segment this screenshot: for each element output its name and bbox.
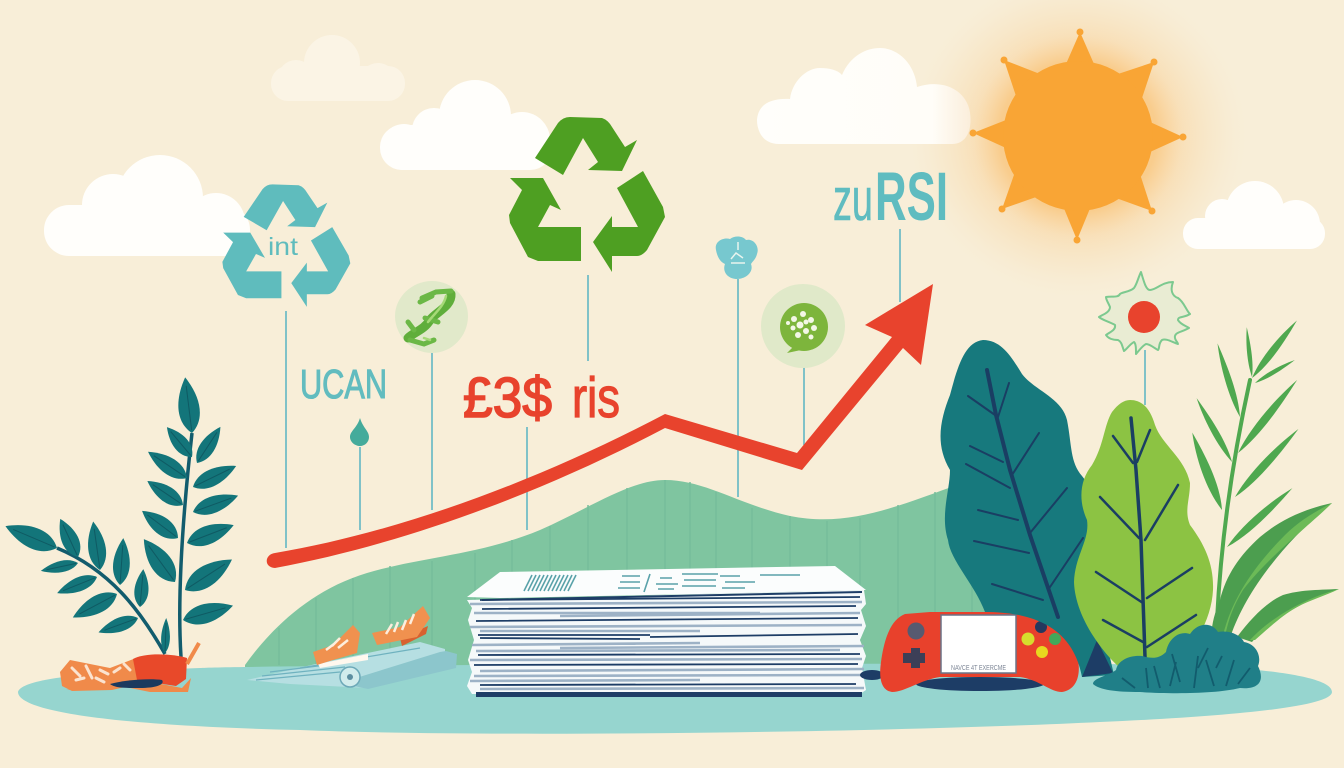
sun: [970, 28, 1186, 244]
icon: teal recycling symbol: [222, 184, 350, 307]
cloud: near sun: [757, 48, 971, 144]
cloud: right: [1183, 181, 1325, 249]
plant: teal leaf: [941, 340, 1114, 677]
icon: green speech badge: [761, 284, 845, 368]
chart: red rising arrow: [267, 284, 933, 568]
icon: spiky flower: [1099, 272, 1190, 354]
icon: green recycling symbol: [509, 117, 665, 272]
icon: green creature badge: [395, 281, 468, 353]
label: price figure: £3$: [463, 366, 552, 430]
label: ris: ris: [572, 366, 620, 430]
ground: [18, 664, 1332, 734]
label: zu: zu: [833, 166, 873, 233]
label: RSI: RSI: [875, 158, 948, 235]
chart: green hill: [245, 480, 1000, 680]
object: paper stack: [467, 566, 866, 697]
screen caption: NAVCE 4T EXERCME: [951, 665, 1006, 672]
label: UCAN: UCAN: [300, 361, 387, 407]
object: red game console: [860, 612, 1079, 692]
plant: teal bush: [1093, 625, 1261, 693]
object: orange shoe left: [313, 625, 368, 668]
sun glow: [903, 0, 1253, 304]
object: orange creature and pot: [60, 643, 199, 692]
object: rolled newspaper: [247, 642, 457, 689]
icon: water drop: [350, 418, 369, 446]
indicator stems: [286, 229, 1145, 548]
object: orange shoe right: [372, 606, 430, 646]
cloud: centre: [380, 80, 552, 170]
plant: light green leaf: [1074, 400, 1213, 668]
label: int: int: [268, 233, 298, 261]
cloud: faint top left: [271, 35, 405, 101]
cloud: left: [44, 155, 250, 256]
plant: tall grass: [1187, 318, 1339, 650]
plant: left fern: [1, 376, 241, 657]
icon: teal flower: [716, 236, 758, 279]
